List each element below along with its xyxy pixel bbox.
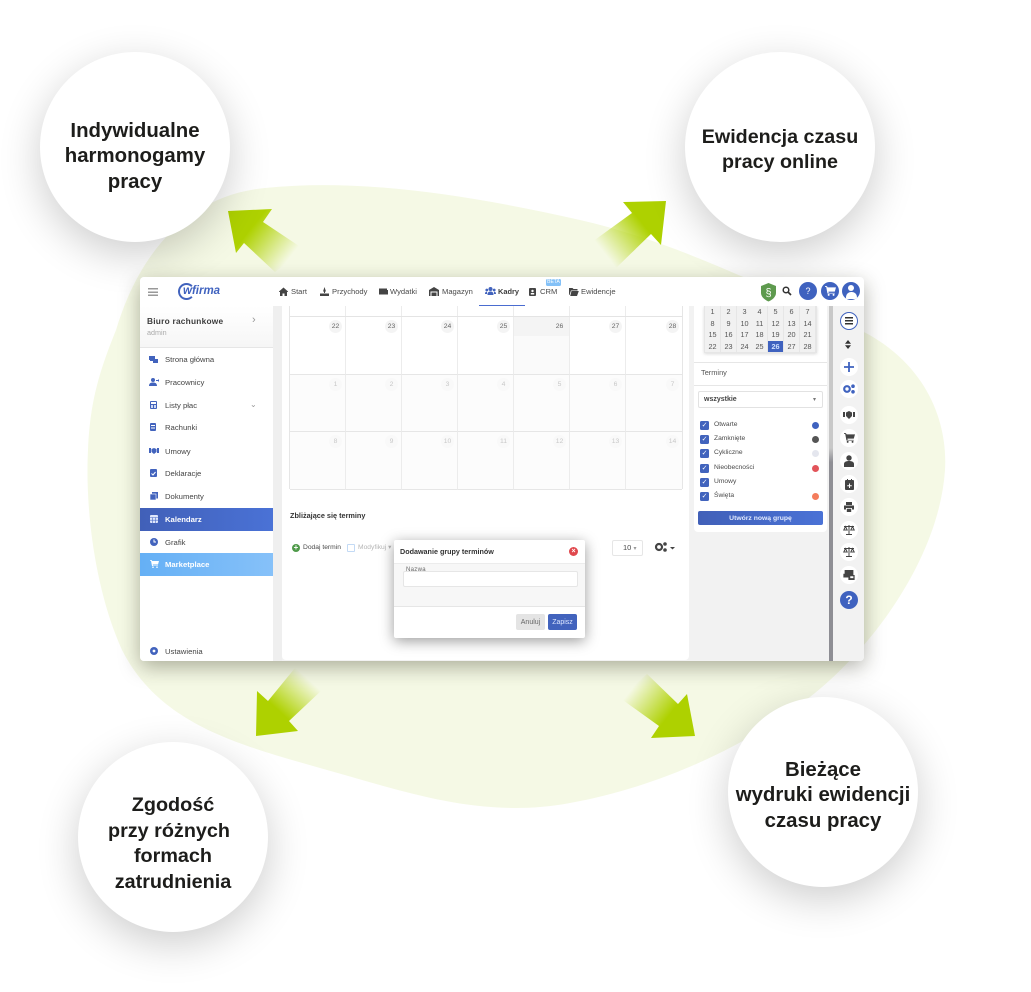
- rail: add: [840, 358, 858, 376]
- mini calendar: 22: [708, 342, 717, 350]
- filter: Nieobecności: Nieobecności: [714, 464, 754, 471]
- button: help: [799, 282, 817, 300]
- callout: Bieżące wydruki ewidencji czasu pracy: wydruki ewidencji: [736, 784, 910, 806]
- week row 1-7: 1: [334, 381, 337, 388]
- filter: Nieobecności: ✓: [702, 464, 707, 472]
- week row 22-28: 24: [444, 323, 451, 330]
- button: save: [548, 614, 577, 630]
- modal: add group of deadlines: [394, 540, 585, 638]
- rail: calendar add: [840, 475, 858, 493]
- toolbar: add deadline: [292, 543, 341, 552]
- icon: settings gears: [654, 542, 675, 552]
- week row 22-28: [290, 317, 682, 375]
- menu: Grafik: [150, 538, 186, 547]
- mini calendar: 6: [789, 307, 794, 316]
- week row 22-28: 22: [332, 323, 339, 330]
- mini calendar: 15: [708, 330, 717, 339]
- filter: Otwarte: Otwarte: [714, 421, 737, 428]
- mini calendar: 18: [755, 330, 764, 339]
- calendar grid: [289, 306, 683, 489]
- menu: Listy płac: ⌄: [250, 400, 257, 409]
- mini calendar: 3: [742, 307, 747, 316]
- rail: scales two: [840, 543, 858, 561]
- select: wszystkie: ▾: [813, 397, 816, 403]
- modal body with name input: Nazwa: [406, 567, 426, 573]
- menu: Deklaracje: Deklaracje: [165, 469, 201, 478]
- rail: person: [840, 452, 858, 470]
- icon: green shield: [761, 283, 776, 302]
- divider lines and label: Terminy: [694, 362, 827, 386]
- mini calendar: 12: [771, 318, 780, 328]
- mini calendar: 27: [787, 342, 796, 350]
- rail: cart: [840, 429, 858, 447]
- mini calendar: 10: [740, 318, 749, 328]
- filter checkboxes: [700, 421, 819, 501]
- week row 1-7: [290, 375, 682, 432]
- toolbar: modify: [347, 544, 392, 552]
- filter: Święta: [700, 491, 819, 501]
- rail: help: ?: [845, 593, 853, 607]
- nav: Magazyn: Magazyn: [442, 287, 473, 296]
- menu: Pracownicy: Pracownicy: [165, 378, 204, 387]
- mini calendar: 17: [740, 330, 749, 339]
- panel: right rail: [833, 306, 864, 661]
- filter: Nieobecności: [700, 464, 819, 473]
- menu: Grafik: Grafik: [165, 538, 186, 547]
- nav: Przychody: Przychody: [332, 287, 367, 296]
- button: user: [842, 282, 860, 300]
- week row 8-14: 11: [500, 438, 507, 445]
- mini calendar: 23: [724, 342, 733, 350]
- icon: search: [782, 286, 792, 296]
- mini calendar: 14: [803, 318, 812, 328]
- filter: Otwarte: [700, 421, 819, 430]
- main content panel: [282, 306, 689, 660]
- week row 1-7: 6: [614, 381, 617, 388]
- filter: Zamknięte: Zamknięte: [714, 435, 745, 442]
- menu: Kalendarz (active): Kalendarz: [165, 515, 202, 524]
- week row 22-28: 23: [388, 323, 395, 330]
- nav: Kadry (active): [479, 277, 525, 306]
- filter: Cykliczne: ✓: [702, 450, 707, 456]
- mini calendar: 25: [755, 342, 764, 350]
- mini calendar: 7: [805, 307, 810, 316]
- toolbar: modify: Modyfikuj ▾: [358, 544, 391, 551]
- week row 22-28: 28: [669, 323, 676, 330]
- mini calendar: [704, 306, 817, 353]
- week row 8-14: 14: [669, 438, 676, 445]
- rail: handshake: [840, 406, 858, 424]
- callout: Indywidualne harmonogramy pracy: harmonogamy: [65, 145, 205, 167]
- nav: Wydatki: Wydatki: [390, 287, 417, 296]
- mini calendar: 21: [803, 330, 812, 339]
- menu: Marketplace (highlight): [140, 553, 273, 576]
- nav: Kadry (active): Kadry: [498, 287, 519, 296]
- logo: wfirma: wfirma: [183, 285, 220, 297]
- nav: CRM: [529, 279, 561, 296]
- week row 8-14: 13: [612, 438, 619, 445]
- button: cancel: Anuluj: [521, 619, 540, 626]
- mini calendar: 24: [740, 342, 749, 350]
- mini calendar: 1: [710, 307, 715, 316]
- mini calendar: 13: [787, 318, 796, 328]
- page size select: 10 ▾: [623, 543, 636, 552]
- button: create new group: Utwórz nową grupę: [729, 515, 792, 522]
- icon: green shield: §: [765, 287, 772, 299]
- week row 22-28: 26: [556, 323, 563, 330]
- mini calendar: 11: [756, 318, 763, 328]
- callout: Bieżące wydruki ewidencji czasu pracy: [728, 697, 918, 887]
- week row 8-14: 8: [334, 438, 337, 445]
- nav: CRM: CRM: [540, 287, 557, 296]
- filter: Umowy: Umowy: [714, 478, 736, 485]
- nav: CRM: BETA: [547, 279, 560, 285]
- callout: Zgodność przy różnych formach zatrudnienia: formach: [134, 845, 212, 867]
- mini calendar: 19: [771, 330, 780, 339]
- menu: Umowy: [149, 447, 191, 456]
- rail: documents: [840, 566, 858, 584]
- divider lines and label: Terminy: Terminy: [701, 368, 727, 377]
- account box: admin: [147, 328, 167, 337]
- toolbar: add deadline: +: [294, 543, 298, 552]
- icon: hamburger: [148, 288, 158, 296]
- mini calendar: 28: [803, 342, 812, 350]
- account box: [140, 306, 273, 348]
- heading: upcoming deadlines: Zbliżające się terminy: [290, 511, 365, 520]
- callout: Bieżące wydruki ewidencji czasu pracy: Bieżące: [785, 759, 861, 781]
- mini calendar: 5: [773, 307, 778, 316]
- week row 8-14: 12: [556, 438, 563, 445]
- week row 1-7: 3: [446, 381, 449, 388]
- week row 22-28: 27: [612, 323, 619, 330]
- filter: Święta: Święta: [714, 492, 734, 499]
- filter: Zamknięte: [700, 435, 819, 444]
- logo: wfirma: [178, 283, 220, 300]
- callout: Bieżące wydruki ewidencji czasu pracy: czasu pracy: [765, 810, 881, 832]
- rail: print: [840, 498, 858, 516]
- mini calendar: 8: [710, 318, 715, 328]
- filter: Święta: ✓: [702, 492, 707, 500]
- button: cancel: [516, 614, 545, 630]
- callout: Indywidualne harmonogramy pracy: Indywidualne: [70, 120, 200, 142]
- filter: Umowy: ✓: [702, 478, 707, 486]
- week row 1-7: 7: [671, 381, 674, 388]
- panel: application window: [140, 277, 864, 661]
- button: help: ?: [805, 286, 810, 296]
- menu: Strona główna: Strona główna: [165, 355, 214, 364]
- header bar: [140, 277, 864, 306]
- filter: Cykliczne: Cykliczne: [714, 449, 743, 456]
- callout: Indywidualne harmonogramy pracy: [40, 52, 230, 242]
- menu: Listy płac: [150, 400, 257, 410]
- week row 8-14: 10: [444, 438, 451, 445]
- menu: Listy płac: Listy płac: [165, 401, 197, 410]
- button: create new group: [698, 511, 823, 525]
- menu: Marketplace (highlight): Marketplace: [165, 560, 209, 569]
- week row 8-14: [290, 432, 682, 490]
- mini calendar: 16: [724, 330, 733, 339]
- panel: sidebar: [140, 306, 273, 661]
- rail: help: [840, 591, 858, 609]
- menu: Kalendarz (active): [140, 508, 273, 531]
- callout: Zgodność przy różnych formach zatrudnienia: przy różnych: [108, 820, 230, 842]
- mini calendar: 9: [726, 318, 731, 328]
- week row 1-7: 4: [502, 381, 505, 388]
- rail: sort: [845, 340, 851, 349]
- select: wszystkie: [698, 391, 823, 408]
- sidebar shadow strip: [273, 306, 282, 661]
- button: save: Zapisz: [552, 619, 573, 626]
- modal title: Dodawanie grupy terminów: [400, 547, 494, 556]
- rail: gears: [840, 380, 858, 398]
- callout: Zgodność przy różnych formach zatrudnienia: Zgodość: [132, 794, 214, 816]
- mini calendar: 20: [787, 330, 796, 339]
- menu: Umowy: Umowy: [165, 447, 191, 456]
- filter: Cykliczne: [700, 449, 819, 458]
- nav: Ewidencje: Ewidencje: [581, 287, 616, 296]
- callout: Zgodność przy różnych formach zatrudnienia: [78, 742, 268, 932]
- filter: Zamknięte: ✓: [702, 436, 707, 442]
- button: cart: [821, 282, 839, 300]
- select: wszystkie: wszystkie: [704, 396, 737, 403]
- panel: right filters: [694, 306, 827, 532]
- menu: Dokumenty: Dokumenty: [165, 492, 204, 501]
- callout: Ewidencja czasu pracy online: Ewidencja czasu: [702, 126, 858, 148]
- rail: list button: [840, 312, 858, 330]
- callout: Zgodność przy różnych formach zatrudnienia: zatrudnienia: [115, 870, 231, 892]
- mini calendar: 4: [757, 307, 762, 316]
- menu: Rachunki: Rachunki: [165, 423, 197, 432]
- rail: scales one: [840, 521, 858, 539]
- callout: Ewidencja czasu pracy online: [685, 52, 875, 242]
- nav: Start: Start: [291, 287, 307, 296]
- week row 22-28: 25: [500, 323, 507, 330]
- menu: Ustawienia: Ustawienia: [165, 647, 203, 656]
- icon: close: [569, 547, 578, 556]
- page size select: [612, 540, 643, 556]
- gray scrollbar: [829, 306, 833, 661]
- icon: close: ×: [571, 548, 576, 555]
- mini calendar: 2: [726, 307, 731, 316]
- week row 1-7: 2: [390, 381, 393, 388]
- week row 1-7: 5: [558, 381, 561, 388]
- account box: ›: [252, 314, 256, 326]
- callout: Indywidualne harmonogramy pracy: pracy: [108, 171, 162, 193]
- toolbar: add deadline: Dodaj termin: [303, 544, 341, 551]
- nav: Start: [279, 287, 307, 296]
- week row 8-14: 9: [390, 438, 393, 445]
- menu: Rachunki: [150, 423, 197, 432]
- account box: Biuro rachunkowe: [147, 316, 223, 326]
- modal body with name input: [394, 563, 585, 607]
- callout: Ewidencja czasu pracy online: pracy online: [722, 151, 838, 173]
- mini calendar: 26: [771, 342, 780, 350]
- filter: Otwarte: ✓: [702, 422, 707, 428]
- filter: Umowy: [700, 478, 736, 487]
